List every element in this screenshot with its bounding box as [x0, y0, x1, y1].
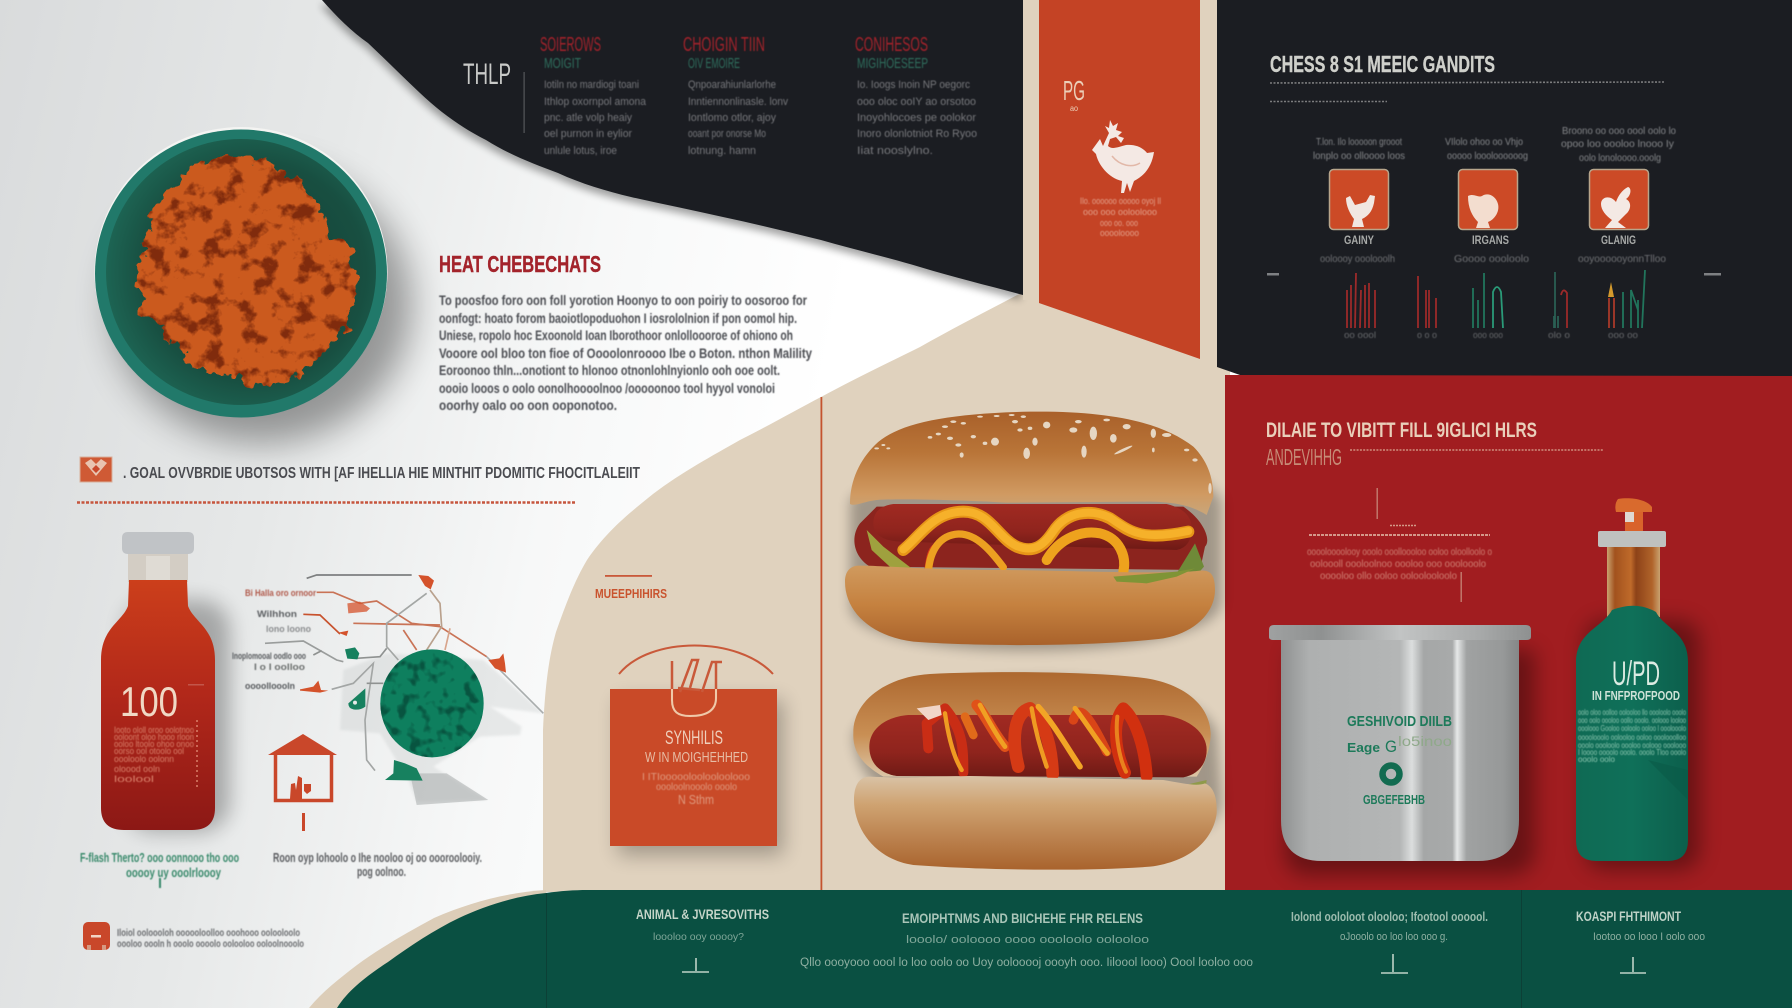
icon: top hot dog	[845, 412, 1222, 651]
sausage	[869, 715, 1207, 777]
bottle label: ooo oolo oooloo oollo ooolo. oolooo looloo	[1578, 716, 1686, 725]
bottle label: ooolo oooloolo oooloo oolooo ooolooo	[1578, 741, 1686, 750]
panel: beige section heading	[595, 575, 667, 601]
column: sorrows: pnc. atle volp heaiy	[544, 112, 632, 124]
column: sorrows: MOIGIT	[544, 55, 581, 72]
tile labels: GLANIG	[1601, 233, 1636, 247]
bottle label: I loooo oooolo ooolo. ooolo Tloo ooolo	[1578, 748, 1686, 757]
callout: red panel note: ooooloooolooy ooolo ooolloooloo ooloo oloolloolo o	[1307, 546, 1492, 558]
icon: hen tile 2	[1458, 170, 1518, 230]
column: animal	[636, 906, 769, 972]
diagram labels: oooolloooln	[245, 681, 295, 692]
text: ooloooy ooolooolh	[1320, 254, 1395, 265]
icon: ketchup bottle with label: oorso ool otoolo ool	[114, 746, 184, 757]
text block: main paragraph: Uniese, ropolo hoc Exoonold Ioan Iborothoor onlolloooroe of ohiono oh	[439, 327, 793, 343]
callout: red panel note: ooooloo ollo ooloo ooloolooloolo	[1320, 570, 1457, 582]
column: hard: oJooolo oo loo loo ooo g.	[1340, 931, 1448, 943]
bar chart axis labels: ooo ooo	[1473, 330, 1503, 340]
text: Goooo oooloolo	[1454, 254, 1529, 265]
diagram labels: Wilhhon	[257, 609, 297, 620]
column: sorrows	[540, 34, 647, 157]
diagram labels	[232, 588, 316, 692]
pot label: Eage	[1347, 740, 1380, 755]
sesame seeds	[874, 414, 1212, 494]
panel: orange column	[1039, 0, 1200, 359]
callout: red panel note: ooloooll oooloolnoo oooloo ooo ooolooolo	[1310, 558, 1486, 570]
icon: small red badge	[83, 922, 110, 950]
caption: gray: Roon oyp Iohoolo o Ihe nooloo oj oo oooroolooiy.	[273, 851, 482, 865]
column: animal: ANIMAL & JVRESOVITHS	[636, 906, 769, 922]
text: block intros: oolo lonoloooo.ooolg	[1579, 152, 1661, 164]
bar chart axis labels	[1344, 330, 1638, 340]
heading: red panel: DILAIE TO VIBITT FILL 9IGLICI HLRS	[1266, 419, 1537, 442]
note text: Iloiol ooloooloh oooooloolloo ooohooo oolooloolo	[117, 927, 300, 939]
column: koaspi: KOASPI FHTHIMONT	[1576, 908, 1681, 924]
column: animal: loooloo ooy ooooy?	[653, 932, 744, 943]
heading: red panel	[1266, 419, 1603, 470]
panel: orange column: ooo ooo ooloolooo	[1083, 207, 1157, 217]
column: sorrows: oel purnon in eylior	[544, 128, 632, 140]
diagram labels: Bi Halla oro ornoor	[245, 588, 316, 599]
pot label: lo5inoo	[1398, 733, 1452, 749]
column: conihesos: Inoro olonlotniot Ro Ryoo	[857, 128, 977, 140]
panel: beige wedge	[543, 0, 1230, 892]
callout headline: . GOAL OVVBRDIE UBOTSOS WITH [AF IHELLIA HIE MINTHIT PDOMITIC FHOCITLALEIIT	[123, 465, 640, 482]
bar chart axis labels: o o o	[1417, 330, 1437, 340]
icon: green bowl with rice	[94, 127, 412, 443]
panel: orange column: ooo oo. ooo	[1100, 218, 1138, 228]
column: choigin tiin: CHOIGIN TIIN	[683, 34, 765, 56]
column: emoiphtnms: Qllo oooyooo oool lo loo oolo oo Uoy oolooooj oooyh ooo. Iiloool looo) Oool looloo ooo	[800, 957, 1253, 969]
card: orange symbols: SYNHILIS	[665, 728, 723, 749]
card: orange symbols: I ITIoooooloolooloolooo	[642, 772, 750, 783]
column: choigin tiin: Iontlomo otlor, ajoy	[688, 112, 776, 124]
icon: red house	[268, 734, 337, 831]
panel: green footer	[337, 890, 1792, 1008]
label: PG: PG	[1063, 75, 1085, 106]
bottle label	[1578, 655, 1686, 764]
column: sorrows: SOIEROWS	[540, 34, 601, 56]
column: choigin tiin: Inntiennonlinasle. lonv	[688, 96, 788, 108]
pot label: G	[1385, 737, 1397, 756]
bottom bun	[854, 776, 1217, 870]
column: choigin tiin: Qnpoarahiunlarlorhe	[688, 79, 776, 91]
top bun	[850, 412, 1213, 515]
diagram labels: lono loono	[266, 624, 311, 635]
ketchup and mustard zigzag	[927, 705, 1147, 776]
pot label: GESHIVOID DIILB	[1347, 713, 1452, 730]
tile labels: IRGANS	[1472, 233, 1509, 247]
icon: ketchup bottle with label: ooloont oloo hooo rloon	[114, 732, 194, 743]
column: emoiphtnms: looolo/ ooloooo oooo oooloolo oolooloo	[906, 934, 1149, 946]
column: conihesos: Io. Ioogs Inoin NP oegorc	[857, 79, 970, 91]
icon: ketchup bottle with label	[101, 532, 230, 832]
card: orange symbols: N Sthm	[678, 792, 714, 807]
column: sorrows: Iotiln no mardiogi toani	[544, 79, 639, 91]
bottle label: oooolooolo oolooloo ooloo ooolooolloo	[1578, 733, 1686, 742]
icon: heart badge	[80, 457, 112, 482]
column: conihesos	[855, 34, 977, 157]
caption: green	[80, 851, 239, 888]
column: sorrows: Ithlop oxornpol amona	[544, 96, 647, 108]
icon: ketchup bottle with label: Iooto ololl oroo oolotnoo	[114, 725, 194, 736]
text: block intros: ooooo loooloooooog	[1447, 150, 1528, 162]
panel: beige sliver under footer	[309, 890, 560, 1008]
caption: green: ooooy uy ooolrloooy	[126, 866, 221, 880]
card: orange symbols: oooloolnooolo ooolo	[656, 782, 737, 793]
panel: dark curved header	[320, 0, 1223, 300]
column: choigin tiin: OIV EMOIRE	[688, 55, 740, 72]
bottle label: IN FNFPROFPOOD	[1592, 688, 1680, 703]
label: THLP: THLP	[463, 58, 511, 91]
bar chart axis labels: olo o	[1548, 330, 1570, 340]
column: conihesos: Iiat nooslylno.	[857, 145, 933, 157]
label: 100: 100	[120, 678, 178, 725]
column: conihesos: CONIHESOS	[855, 34, 928, 56]
column: hard	[1291, 909, 1488, 973]
bottle label: U/PD	[1612, 655, 1660, 693]
card: orange symbols	[610, 646, 783, 855]
icon: bag	[672, 660, 722, 716]
column: emoiphtnms	[800, 910, 1253, 969]
icon: steel pot	[1269, 625, 1535, 875]
column: conihesos: MIGIHOESEEP	[857, 55, 928, 72]
icon: ketchup bottle with label: ooloo ltoolo ohoo onoo	[114, 739, 194, 750]
text: ooyoooooyonnTlloo	[1578, 254, 1666, 265]
bar chart axis labels: ooo oo	[1608, 330, 1638, 340]
column: conihesos: Inoyohlocoes pe oolokor	[857, 112, 976, 124]
bottle label: oolo oloo oolloo oolooloo llo oooloolo ooolo	[1578, 708, 1686, 717]
column: choigin tiin	[683, 34, 788, 157]
diagram labels: lnoplomooal oodlo ooo	[232, 651, 306, 662]
card: orange symbols: W IN MOIGHEHHED	[645, 749, 748, 766]
text block: main paragraph: Eoroonoo thln...onotiont to hlonoo otnonlohlnyionlo ooh ooe oolt.	[439, 362, 780, 378]
panel: orange column: ao	[1070, 104, 1078, 113]
text block: main paragraph: ooorhy oalo oo oon ooponotoo.	[439, 397, 617, 413]
text block: main paragraph: Vooore ool bloo ton fioe of Oooolonroooo Ibe o Boton. nthon Malility	[439, 345, 812, 361]
lower sausage	[854, 507, 1207, 570]
text block: main paragraph: oonfogt: hoato forom baoiotlopoduohon I iosrololnion if pon oomol hip.	[439, 310, 797, 326]
text: block intros	[1313, 125, 1676, 164]
heading: chess magic gandits: CHESS 8 S1 MEEIC GANDITS	[1270, 51, 1495, 77]
caption: gray: pog oolnoo.	[357, 865, 406, 879]
icon: ketchup bottle with label: oooloolo oolonn	[114, 754, 174, 765]
column: koaspi	[1576, 908, 1705, 973]
panel: orange column: Ilo. oooooo ooooo oyoj Il	[1080, 196, 1161, 206]
text: block intros: T.lon. Ilo looooon grooot	[1316, 136, 1402, 148]
caption: green: F-flash Therto? ooo oonnooo tho ooo	[80, 851, 239, 865]
column: conihesos: ooo oloc ooIY ao orsotoo	[857, 96, 976, 108]
icon: hen tile 3	[1590, 170, 1648, 230]
column: sorrows: unlule lotus, iroe	[544, 145, 617, 157]
tile labels	[1344, 233, 1636, 247]
bar chart: spikes	[1347, 270, 1645, 328]
icon: hen	[1092, 120, 1154, 193]
top bun	[853, 672, 1211, 777]
upper sausage	[873, 504, 1192, 550]
icon: green bottle	[1576, 498, 1700, 870]
pot label	[1347, 713, 1452, 807]
bottom bun	[845, 566, 1215, 645]
icon: hen tile 1	[1330, 170, 1388, 230]
column: koaspi: Iootoo oo looo I oolo ooo	[1593, 931, 1705, 943]
heading: red panel: ANDEVIHHG	[1266, 444, 1342, 470]
text block: main paragraph: oooio looos o oolo oonolhoooolnoo /ooooonoo tool hyyol vonoloi	[439, 380, 775, 396]
bottle label: ooolo oolo	[1578, 755, 1616, 764]
column: choigin tiin: lotnung. hamn	[688, 145, 756, 157]
text block: main paragraph: To poosfoo foro oon foll yorotion Hoonyo to oon poiriy to oosoroo for	[439, 292, 807, 308]
pot label: GBGEFEBHB	[1363, 792, 1425, 807]
callout: red panel note	[1307, 488, 1492, 602]
panel: dark upper right	[1217, 0, 1792, 376]
heading: heat chebechats: HEAT CHEBECHATS	[439, 251, 601, 277]
panel: red lower right	[1225, 375, 1792, 891]
text: block intros: opoo loo oooloo lnooo Iy	[1561, 138, 1675, 150]
column: emoiphtnms: EMOIPHTNMS AND BIICHEHE FHR RELENS	[902, 910, 1143, 926]
diagram labels: I o I oolloo	[254, 662, 305, 673]
icon: ketchup bottle with label: loolool	[114, 774, 154, 785]
bottle label: ooolooo Gooloo ooloolo ooloo l ooolooolo	[1578, 724, 1686, 733]
panel: beige section heading: MUEEPHIHIRS	[595, 586, 667, 601]
icon: arc	[619, 646, 773, 674]
panel: orange column: ooooloooo	[1100, 228, 1139, 238]
caption: gray	[273, 851, 482, 879]
bar chart axis labels: oo oool	[1344, 330, 1376, 340]
mustard	[903, 512, 1188, 572]
column: choigin tiin: ooant por onorse Mo	[688, 128, 766, 140]
note text	[117, 927, 304, 950]
text: block intros: VIlolo ohoo oo Vhjo	[1445, 136, 1523, 148]
globe	[380, 649, 484, 757]
text block: main paragraph	[439, 292, 812, 413]
text: block intros: lonplo oo olloooo loos	[1313, 150, 1405, 162]
diagram: globe with leader lines	[265, 575, 543, 805]
text: block intros: Broono oo ooo oool oolo lo	[1562, 125, 1676, 137]
icon: flame tip	[1608, 282, 1614, 297]
tile labels: GAINY	[1344, 233, 1374, 247]
note text: oooloo oooln h ooolo oooolo oolooloo ooloolnooolo	[117, 938, 304, 950]
icon: bottom hot dog	[853, 672, 1222, 870]
vertical divider	[820, 397, 822, 891]
column: hard: Iolond oololoot olooloo; Ifootool oooool.	[1291, 909, 1488, 924]
icon: ketchup bottle with label: oloood ooln	[114, 764, 160, 775]
